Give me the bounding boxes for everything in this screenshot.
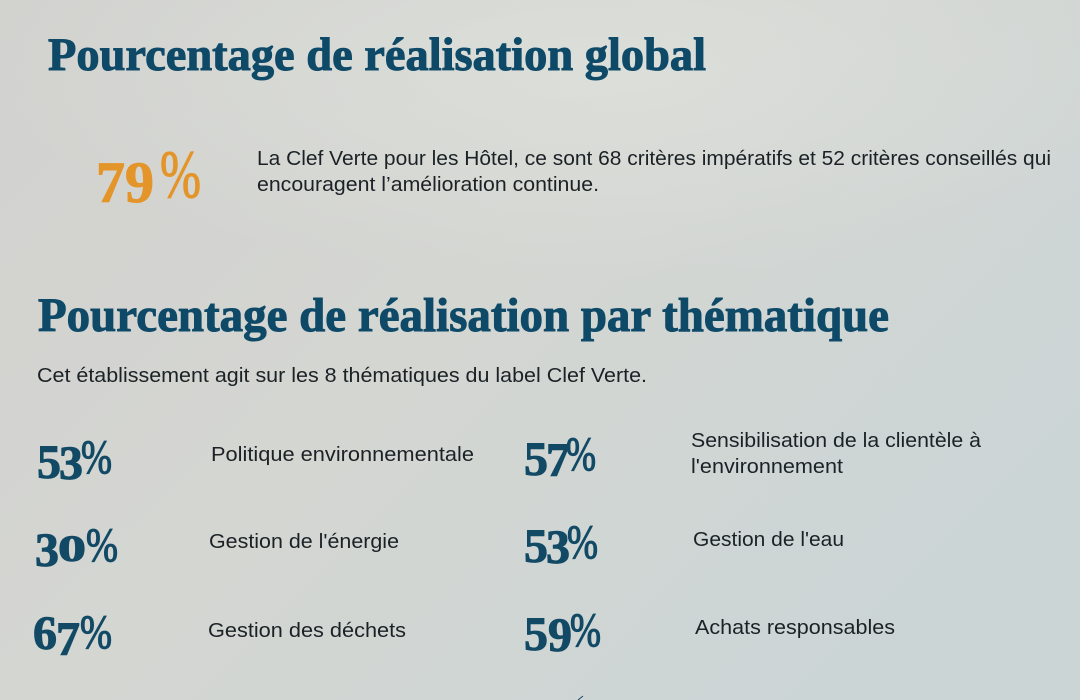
item: Sensibilisation de la clientèle: Sensibilisation de la clientèle à	[691, 429, 982, 452]
item: Gestion de l'eau: %	[567, 516, 598, 569]
item: Gestion de l'eau: Gestion de l'eau	[693, 528, 844, 551]
text block: global description	[257, 148, 1051, 196]
item: Gestion des déchets: 67	[33, 607, 80, 666]
item: Gestion des déchets	[33, 606, 406, 666]
item: Sensibilisation de la clientèle: 57	[524, 433, 570, 487]
item: Gestion de l'énergie: %	[86, 519, 118, 572]
item: Politique environnementale: Politique environnementale	[211, 443, 474, 466]
title: global achievement: Pourcentage de réalisation global	[48, 29, 706, 81]
item: Gestion de l'eau	[524, 516, 844, 574]
global percentage: 79%: 79	[96, 150, 154, 215]
item: Gestion de l'énergie: Gestion de l'énergie	[209, 530, 399, 553]
item: Sensibilisation de la clientèle: l'environnement	[691, 455, 843, 478]
item: Gestion de l'énergie: 3	[35, 524, 59, 577]
intro text: Cet établissement agit sur les 8 thématiques du label Clef Verte.	[37, 365, 647, 387]
text block: global description: La Clef Verte pour les Hôtel, ce sont 68 critères impératifs et 52 critères conseillés qui	[257, 148, 1051, 170]
item: Sensibilisation de la clientèle: %	[566, 428, 596, 481]
item: Achats responsables: 59	[524, 608, 572, 662]
item: Gestion de l'énergie: 0	[58, 529, 86, 570]
item: Politique environnementale	[37, 431, 474, 490]
item: Achats responsables: %	[570, 604, 601, 657]
item: Gestion de l'eau: 53	[524, 520, 570, 574]
item: Achats responsables: Achats responsables	[695, 616, 895, 639]
item: Gestion des déchets: %	[80, 606, 112, 659]
text block: global description: encouragent l’amélioration continue.	[257, 174, 599, 196]
item: Politique environnementale: %	[81, 431, 112, 484]
item: Sensibilisation de la clientèle	[524, 428, 982, 487]
global percentage: 79%	[96, 136, 201, 215]
item: Gestion de l'énergie	[35, 519, 399, 577]
title: achievement by theme: Pourcentage de réalisation par thématique	[38, 290, 889, 342]
item: Gestion des déchets: Gestion des déchets	[208, 619, 406, 642]
item: Achats responsables	[524, 604, 895, 662]
global percentage: 79%: %	[160, 136, 201, 212]
item: Politique environnementale: 53	[37, 436, 83, 490]
